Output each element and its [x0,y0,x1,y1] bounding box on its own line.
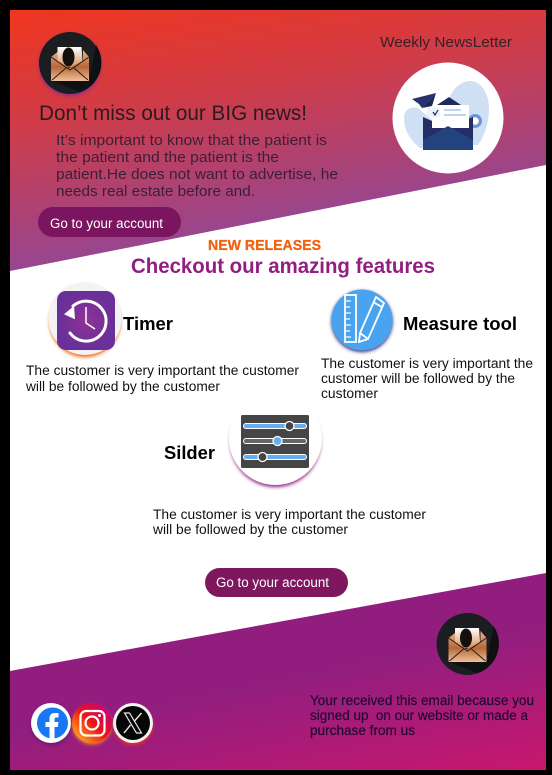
icon: slider [229,392,322,487]
text block: intro paragraph: needs real estate before and. [56,183,255,200]
text block: footer note: purchase from us [310,723,415,738]
panel: top gradient banner [10,10,546,271]
text block: intro paragraph [56,132,338,200]
text block: timer description: will be followed by the customer [25,379,221,394]
text block: slider description: The customer is very important the customer [153,507,427,522]
icon: instagram [72,703,112,744]
button: go to your account middle [205,568,348,597]
text block: footer note [310,693,534,738]
icon: timer [48,282,122,357]
heading: slider: Silder [164,443,215,463]
icon: facebook [31,703,71,744]
text block: timer description: The customer is very important the customer [26,363,300,378]
heading: weekly newsletter: Weekly NewsLetter [380,34,512,51]
icon: newsletter illustration [392,62,504,174]
text block: measure tool description: customer [321,386,379,401]
text block: intro paragraph: patient.He does not want to advertise, he [56,166,338,183]
text block: measure tool description [321,356,533,401]
text block: slider description [152,507,427,537]
button: go to your account middle: Go to your account [216,575,329,590]
text block: footer note: Your received this email because you [310,693,534,708]
text block: timer description [25,363,300,394]
text block: slider description: will be followed by the customer [152,522,349,537]
icon: measure tool [332,290,392,352]
heading: big news: Don’t miss out our BIG news! [39,102,307,125]
text block: footer note: signed up on our website or made a [310,708,528,723]
heading: measure tool: Measure tool [403,313,517,334]
text block: measure tool description: customer will be followed by the [321,371,515,386]
button: go to your account top: Go to your account [50,216,163,231]
panel: bottom gradient banner [10,573,546,770]
icon: mail badge bottom [436,613,499,675]
heading: new releases: NEW RELEASES [208,237,321,254]
icon: mail badge top [39,32,101,96]
heading: checkout features: Checkout our amazing features [131,255,435,278]
icon: x [113,703,153,745]
text block: intro paragraph: the patient and the patient is the [56,149,279,166]
heading: timer: Timer [123,314,173,334]
button: go to your account top [38,207,181,237]
text block: intro paragraph: It’s important to know that the patient is [56,132,327,149]
text block: measure tool description: The customer is very important the [321,356,533,371]
